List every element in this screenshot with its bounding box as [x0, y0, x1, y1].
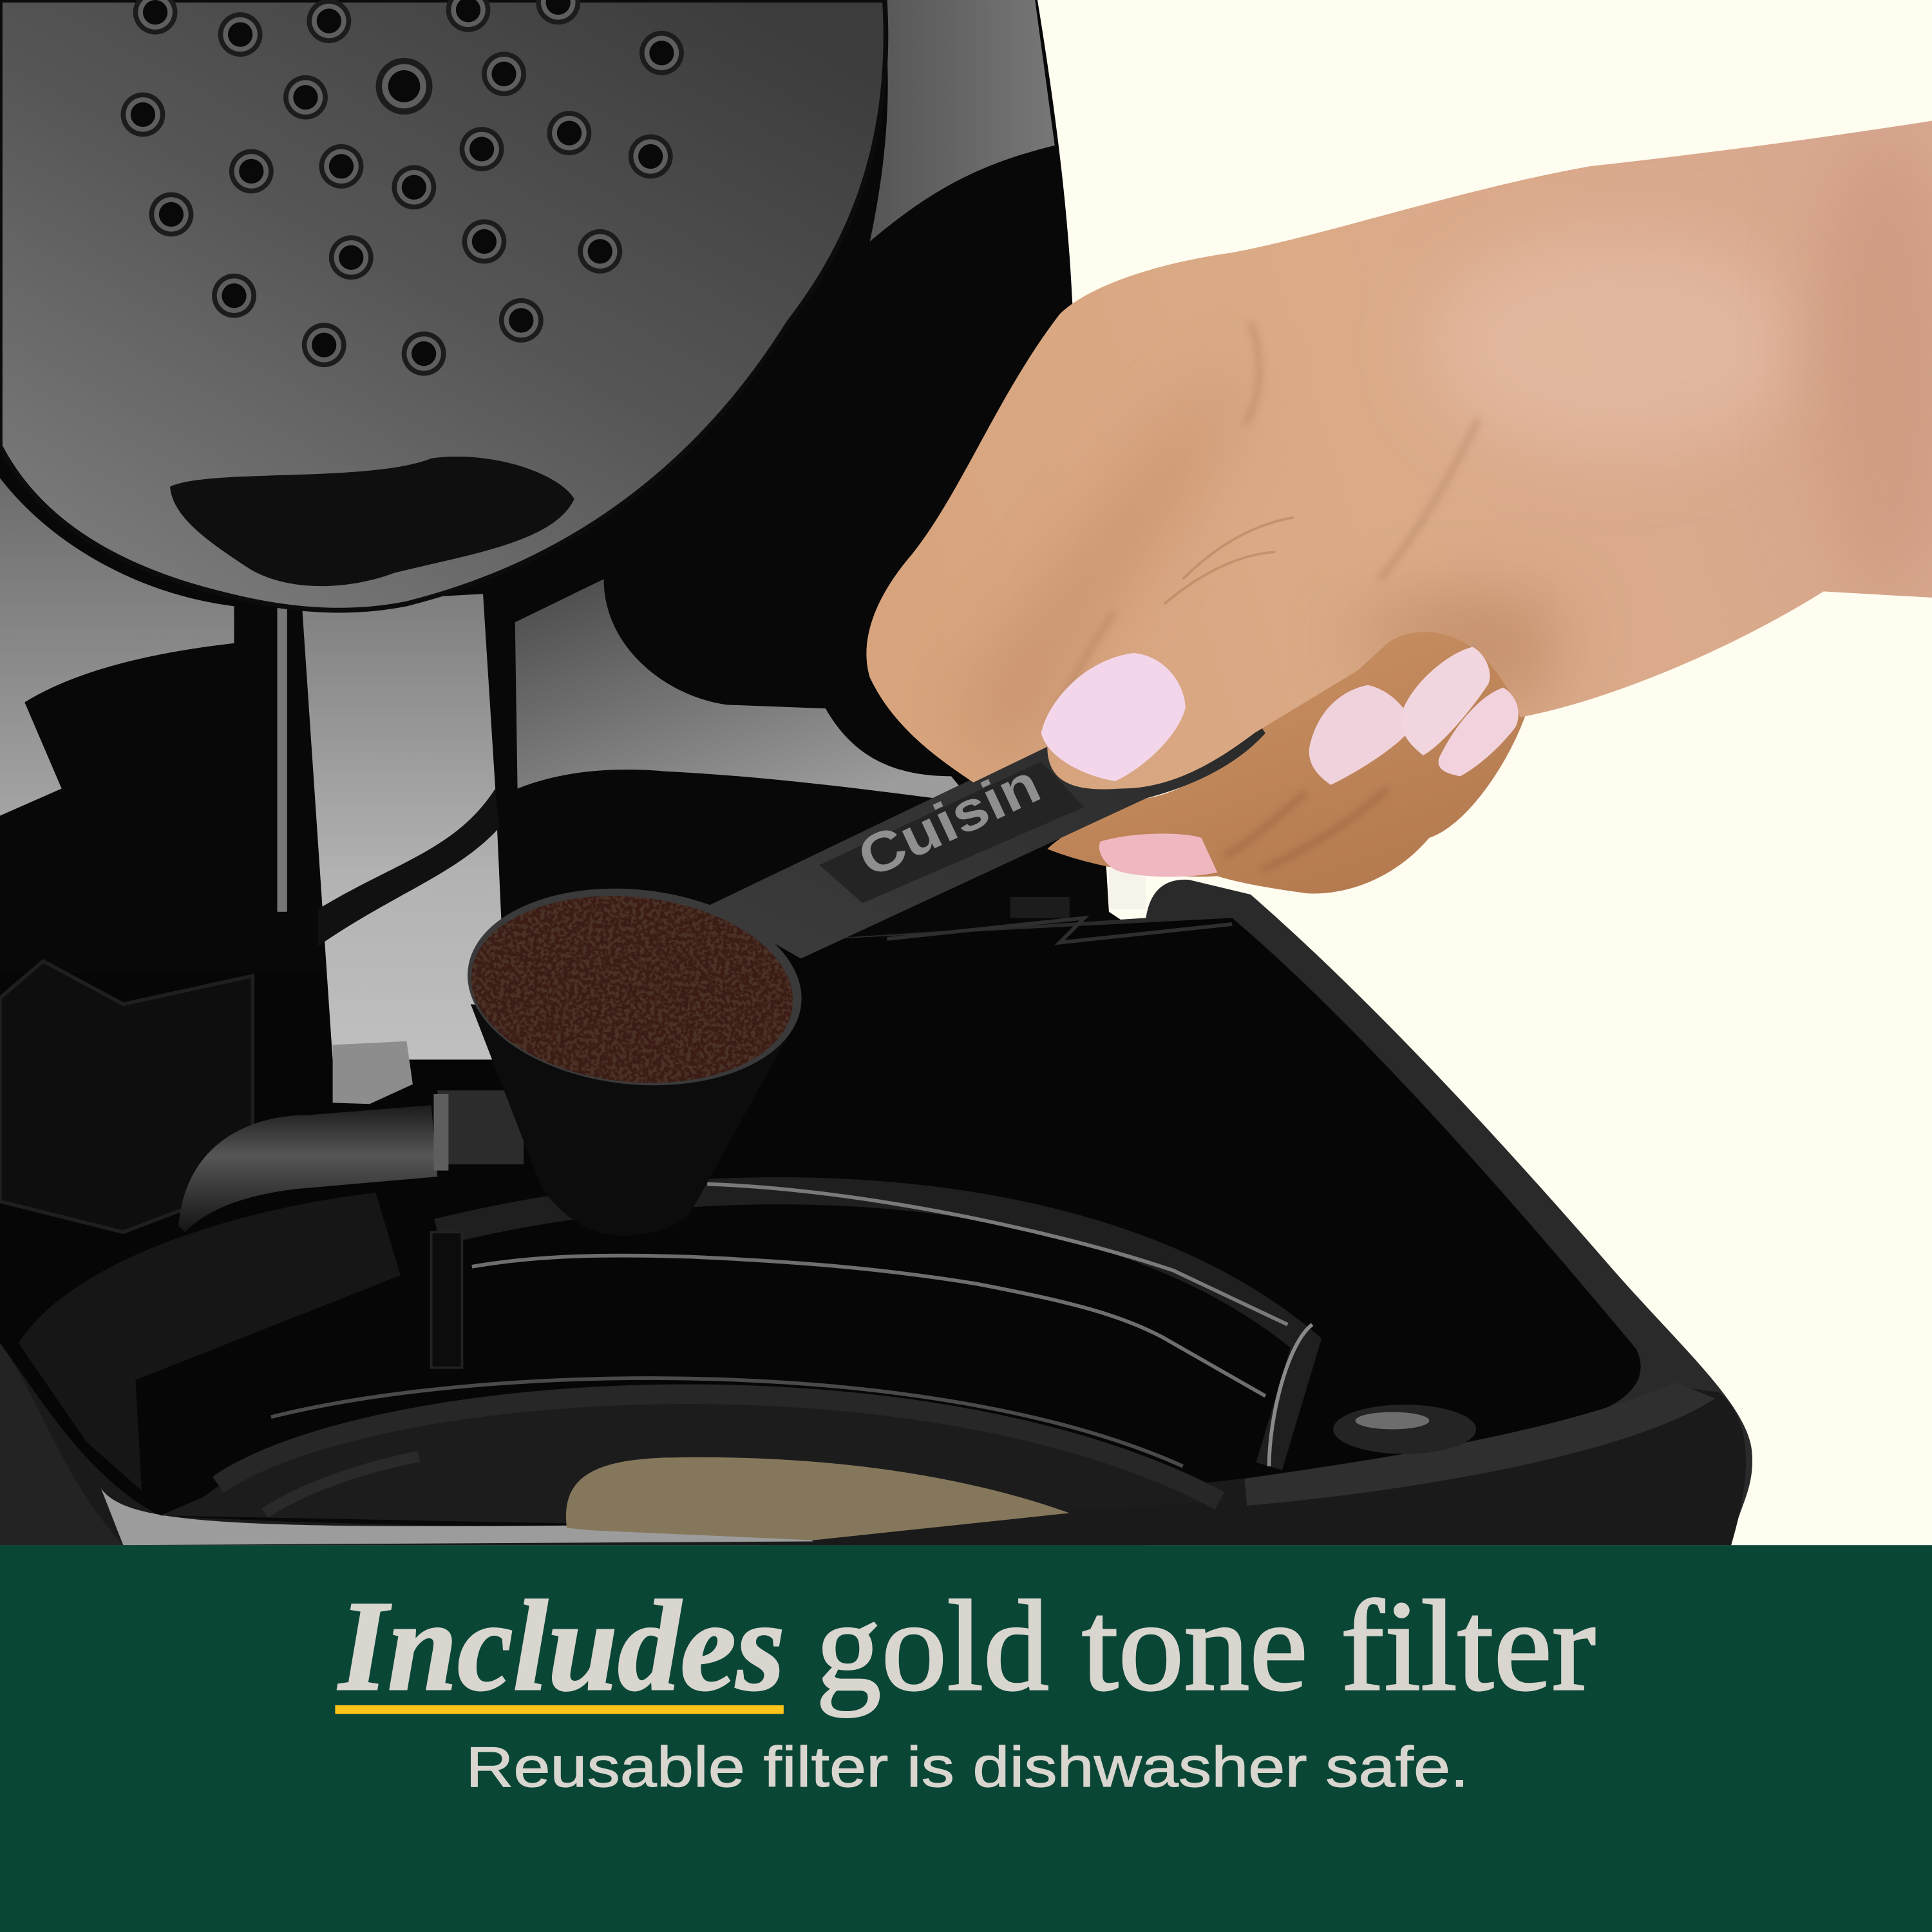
side knob	[1333, 1405, 1476, 1454]
fingernail: middle	[1309, 685, 1411, 785]
scoop logo plate	[819, 761, 1084, 903]
yellow underline	[335, 1705, 784, 1714]
water pipe elbow	[178, 1090, 524, 1232]
measuring scoop with ground coffee	[458, 721, 1265, 1236]
fingernail: little	[1439, 688, 1519, 776]
brew basket rings	[19, 1184, 1312, 1528]
shower head disc with water holes	[0, 0, 886, 611]
fingernail: thumb	[1041, 653, 1186, 781]
hand and thumb	[866, 121, 1932, 790]
heading emphasis word: Includes	[337, 1575, 785, 1718]
water holes	[121, 0, 684, 376]
heading	[337, 1575, 1596, 1718]
heading remainder: gold tone filter	[816, 1575, 1596, 1718]
coffee maker base with reservoir	[0, 880, 1752, 1545]
brand text on scoop: Cuisin	[849, 752, 1049, 889]
scoop cone	[471, 1004, 788, 1236]
lower fingers of hand	[1047, 616, 1528, 894]
subheading: Reusable filter is dishwasher safe.	[466, 1735, 1469, 1799]
cream background	[0, 0, 1932, 1545]
fingernail: ring	[1401, 647, 1490, 755]
fingernail: index	[1099, 833, 1217, 877]
ground coffee	[462, 880, 802, 1098]
scoop handle	[708, 721, 1265, 959]
hand shading	[973, 135, 1932, 776]
green caption band	[0, 1545, 1932, 1932]
scoop rim	[458, 873, 811, 1101]
coffee maker open lid back panel	[0, 0, 1146, 1545]
lid support column	[277, 594, 507, 1104]
gold tone filter	[566, 1457, 1070, 1540]
